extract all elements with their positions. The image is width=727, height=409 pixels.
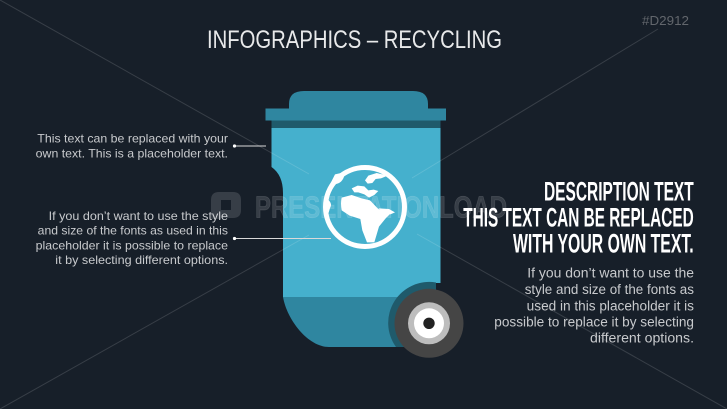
text block: top left: own text. This is a placeholder text. [36, 146, 228, 160]
bin rim [266, 108, 446, 120]
bin base [283, 297, 410, 347]
heading: description [463, 177, 694, 258]
wheel [394, 289, 464, 358]
text block: right body: possible to replace it by selecting [494, 315, 694, 330]
text block: lower left: and size of the fonts as used in this [38, 224, 228, 238]
text block: lower left: placeholder it is possible to replace [36, 238, 228, 252]
connector: top label [233, 144, 266, 148]
text block: top left [36, 132, 228, 160]
watermark text: PRESENTATIONLOAD [255, 190, 507, 224]
product code: #D2912 [642, 13, 689, 28]
watermark icon [211, 192, 241, 219]
text block: right body: used in this placeholder it is [527, 298, 694, 313]
illustration: recycling bin [266, 91, 464, 358]
text block: right body [494, 265, 694, 346]
rim shadow [272, 120, 440, 128]
bin lid [289, 91, 428, 109]
connector: lower label [233, 237, 331, 240]
text block: lower left: If you don’t want to use the style [49, 209, 228, 223]
watermark [211, 190, 507, 224]
bin body [272, 128, 440, 297]
wheel arch [388, 282, 436, 347]
text block: lower left [36, 209, 228, 267]
text block: right body: If you don’t want to use the [527, 265, 694, 280]
title: INFOGRAPHICS – RECYCLING [207, 26, 502, 54]
text block: top left: This text can be replaced with your [37, 132, 228, 146]
text block: right body: different options. [590, 331, 694, 346]
text block: right body: style and size of the fonts as [525, 282, 694, 297]
globe icon [324, 168, 404, 246]
text block: lower left: it by selecting different options. [55, 253, 228, 267]
